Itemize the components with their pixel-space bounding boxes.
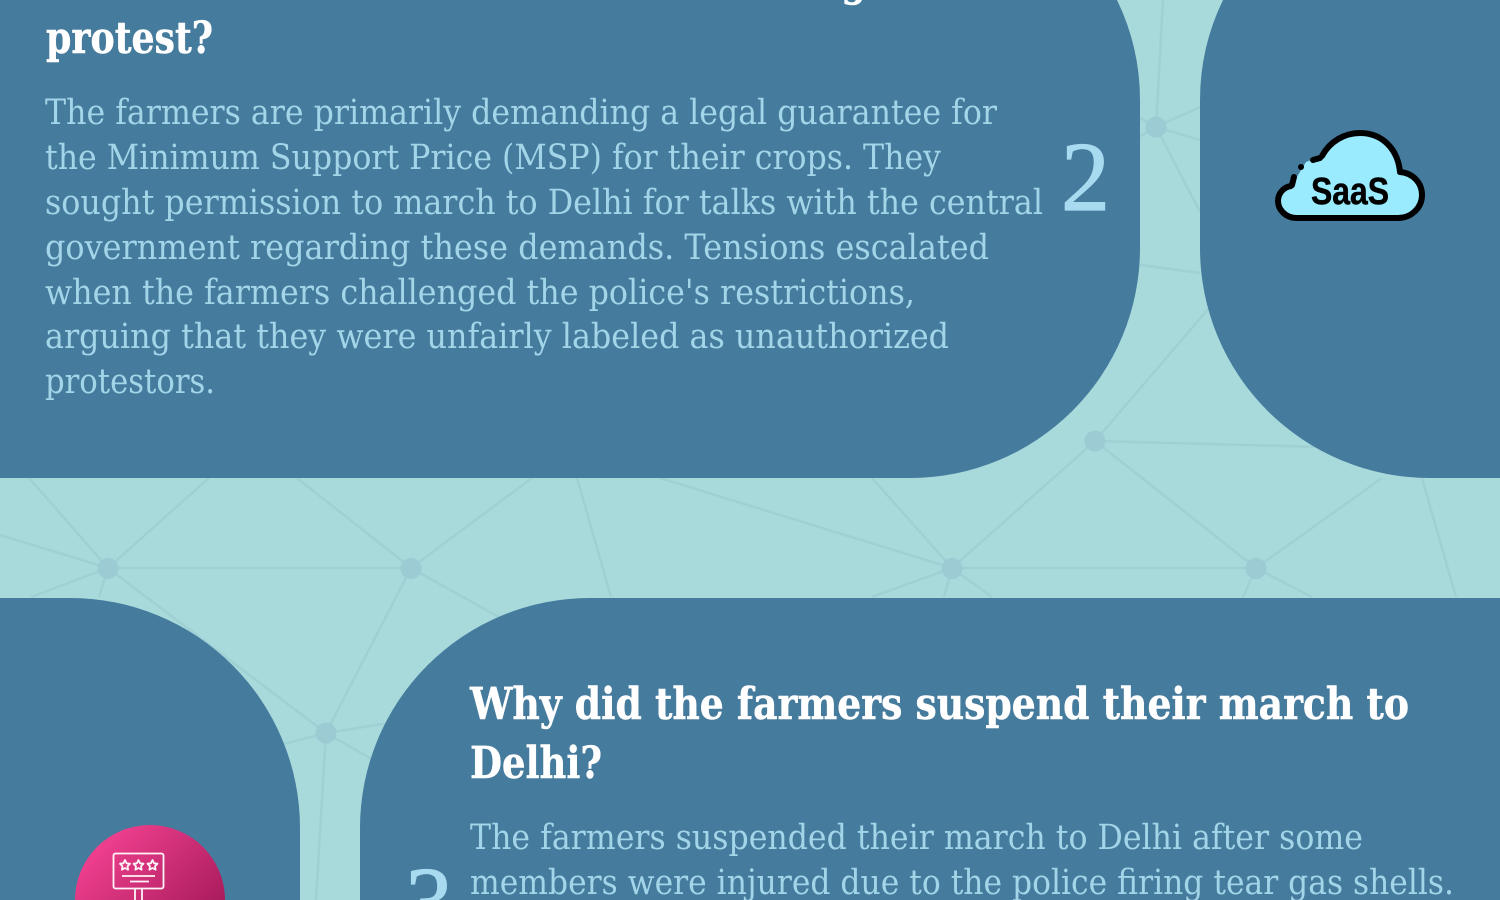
panel: suspended march text card (360, 598, 1500, 900)
text block: demands answer: arguing that they were unfairly labeled as unauthorized (45, 317, 949, 357)
icon: SaaS cloud: SaaS (1311, 171, 1389, 213)
text block: demands answer (45, 93, 1043, 402)
text block: demands answer: when the farmers challenged the police's restrictions, (45, 273, 915, 313)
heading: suspended march question: Delhi? (470, 738, 602, 789)
panel: rating icon card (0, 598, 300, 900)
number 2: 2 (1061, 123, 1110, 232)
text block: demands answer: the Minimum Support Price (MSP) for their crops. They (45, 138, 941, 178)
heading: demands question (45, 0, 944, 64)
text block: demands answer: sought permission to march to Delhi for talks with the central (45, 183, 1043, 223)
panel: SaaS icon card (1200, 0, 1500, 478)
text block: demands answer: government regarding these demands. Tensions escalated (45, 228, 989, 268)
panel: farmers' demands text card (0, 0, 1140, 478)
text block: suspended march answer (470, 818, 1454, 900)
heading: demands question: protest? (46, 13, 213, 64)
icon: SaaS cloud (1278, 133, 1422, 218)
heading: suspended march question (469, 679, 1409, 789)
text block: suspended march answer: The farmers suspended their march to Delhi after some (470, 818, 1363, 858)
text block: demands answer: protestors. (45, 362, 215, 402)
text block: demands answer: The farmers are primarily demanding a legal guarantee for (45, 93, 997, 133)
icon: pink circle with rating signboard (75, 825, 225, 900)
